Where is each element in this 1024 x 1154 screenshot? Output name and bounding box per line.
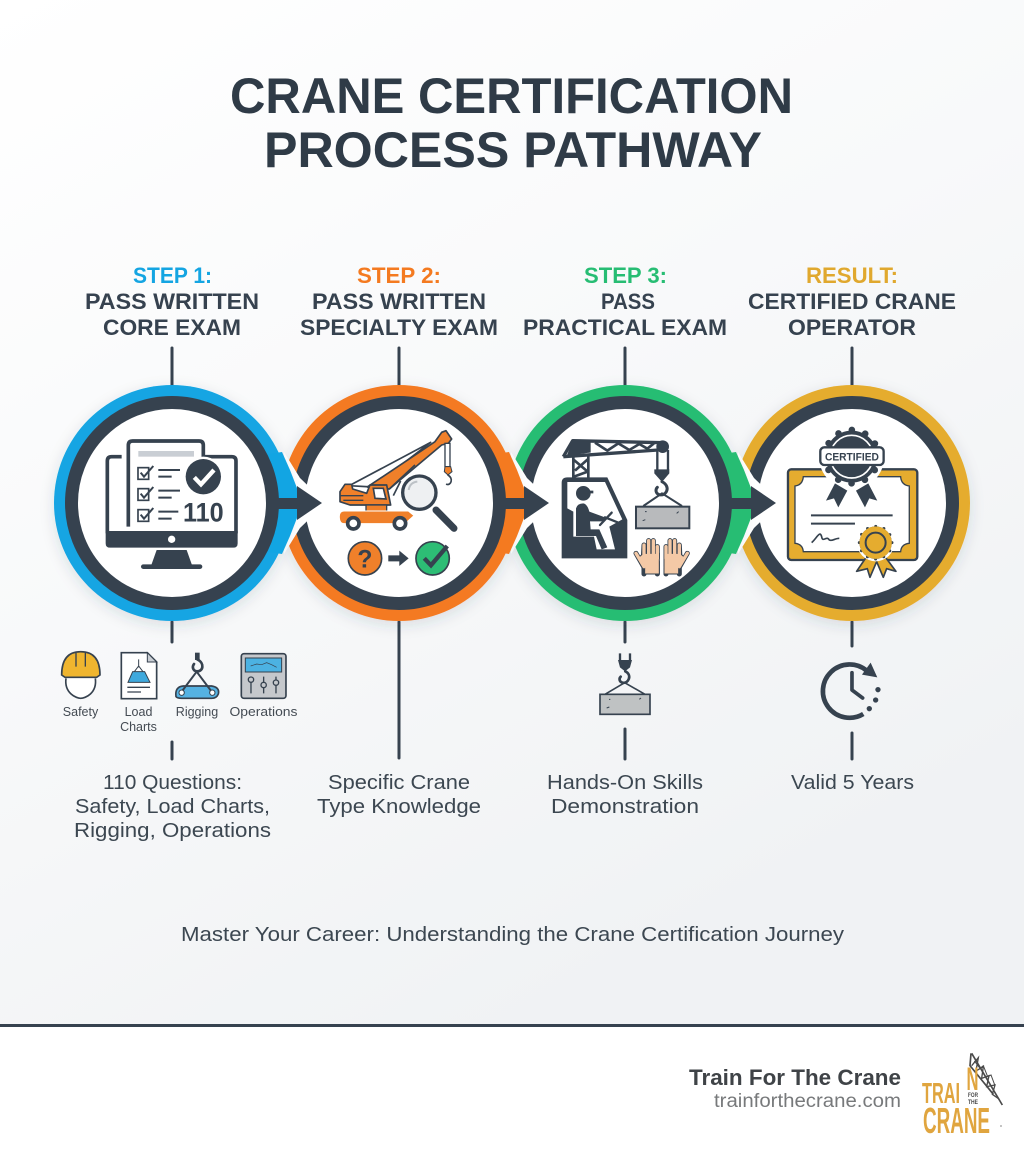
logo: train for the crane: N [966,1061,978,1097]
text: step 1 description: Rigging, Operations [74,820,271,842]
text: step 3 description: Hands-On Skills [547,772,703,794]
step 3 medallion: practical exam [507,385,776,621]
label: load charts: Load [125,705,152,719]
icon: load chart document [121,653,157,699]
text: step 1 description [74,772,271,842]
logo: train for the crane: FOR [968,1093,979,1099]
heading: step 2 [300,263,498,340]
logo: train for the crane [922,1053,1002,1141]
label: rigging: Rigging [176,705,218,719]
heading: step 1: PASS WRITTEN [85,289,259,314]
heading: step 3: PRACTICAL EXAM [523,315,727,340]
text: step 2 description: Type Knowledge [317,796,481,818]
step 4 medallion: certificate [734,385,970,621]
icon: certificate: CERTIFIED [825,451,879,463]
heading: result: RESULT: [806,263,898,288]
text: step 3 description: Demonstration [551,796,699,818]
label: load charts: Charts [120,720,157,734]
heading: result: CERTIFIED CRANE [748,289,956,314]
icon: operations control panel [241,654,286,698]
icon: certificate [788,424,917,577]
heading: step 2: PASS WRITTEN [312,289,486,314]
heading: step 1 [85,263,259,340]
text: step 2 description [317,772,481,818]
icon: operator in crane cab with hands [562,440,689,574]
label: safety: Safety [63,705,99,719]
heading: step 2: SPECIALTY EXAM [300,315,498,340]
heading: result [748,263,956,340]
text: step 1 description: Safety, Load Charts, [75,796,270,818]
icon: clock with renewal arrow [823,663,881,718]
text: step 1 description: 110 Questions: [103,772,242,794]
heading: step 3: PASS [601,289,655,314]
icon: monitor with checklist [106,441,238,569]
logo: train for the crane: THE [968,1100,978,1106]
arrow: step 2 to step 3 [511,452,553,554]
logo: train for the crane: TRAI [922,1078,960,1110]
title [230,68,793,178]
arrow: step 3 to result [738,452,780,554]
tagline: Master Your Career: Understanding the Crane Certification Journey [181,924,844,946]
footer brand text: trainforthecrane.com [714,1091,901,1112]
icon: mobile crane with magnifier and check: ? [357,546,372,573]
icon: hook with load [600,653,650,714]
footer panel [0,1024,1024,1154]
connector lines [172,348,852,759]
heading: step 1: CORE EXAM [103,315,241,340]
icon row: core exam topics [62,652,297,734]
label: operations: Operations [230,705,298,719]
icon: safety helmet [62,652,100,698]
step 1 medallion: written core exam [54,385,322,621]
arrow: step 1 to step 2 [284,452,326,554]
heading: step 3: STEP 3: [584,263,667,288]
footer brand text: Train For The Crane [689,1065,901,1090]
footer brand text [689,1065,901,1112]
icon: monitor with checklist: 110 [183,498,224,528]
title: PROCESS PATHWAY [264,122,762,178]
title: CRANE CERTIFICATION [230,68,793,124]
heading: step 3 [523,263,727,340]
heading: step 2: STEP 2: [357,263,441,288]
text: result description: Valid 5 Years [791,772,914,794]
heading: step 1: STEP 1: [133,263,212,288]
step 2 medallion: specialty exam [281,385,549,621]
text: step 3 description [547,772,703,818]
icon: rigging hook and sling [176,653,219,698]
text: step 2 description: Specific Crane [328,772,470,794]
icon: mobile crane with magnifier and check [339,431,454,575]
heading: result: OPERATOR [788,315,916,340]
